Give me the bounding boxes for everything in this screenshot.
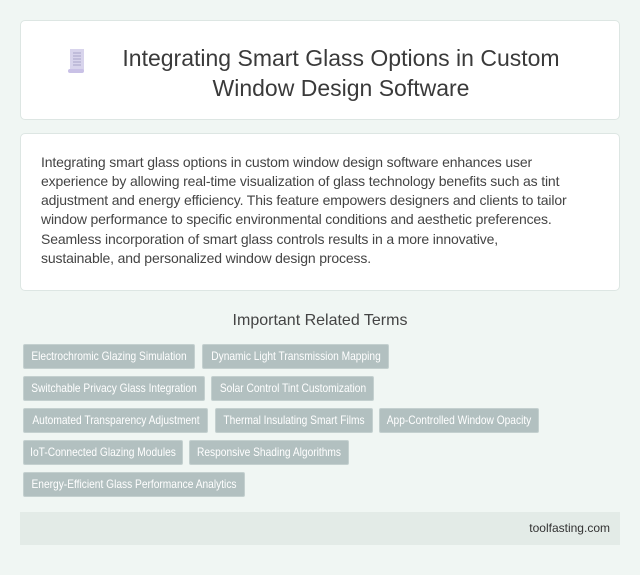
tags: Electrochromic Glazing Simulation <box>31 349 187 363</box>
description panel: sustainable, and personalized window design process. <box>41 250 371 266</box>
icon: document <box>68 49 84 73</box>
header panel <box>20 20 620 120</box>
tags: Dynamic Light Transmission Mapping <box>211 349 380 363</box>
tags: Energy-Efficient Glass Performance Analytics <box>31 477 237 491</box>
tags: Switchable Privacy Glass Integration <box>31 381 197 395</box>
description panel: experience by allowing real-time visualization of glass technology benefits such as tint <box>41 173 559 189</box>
tags: Responsive Shading Algorithms <box>197 445 341 459</box>
heading: related terms: Important Related Terms <box>233 312 407 329</box>
tags: IoT-Connected Glazing Modules <box>30 445 176 459</box>
description panel: adjustment and energy efficiency. This feature empowers designers and clients to tailor <box>41 192 566 208</box>
tags: Automated Transparency Adjustment <box>32 413 199 427</box>
description panel <box>20 133 620 291</box>
tags: Solar Control Tint Customization <box>219 381 366 395</box>
title: Integrating Smart Glass Options in Custom Window Design Software <box>122 45 560 101</box>
tags: App-Controlled Window Opacity <box>387 413 531 427</box>
footer <box>20 512 620 545</box>
tags: Thermal Insulating Smart Films <box>223 413 365 427</box>
description panel: window performance to specific environmental conditions and aesthetic preferences. <box>41 211 552 227</box>
footer: toolfasting.com <box>529 521 610 535</box>
description panel: Seamless incorporation of smart glass controls results in a more innovative, <box>41 231 498 247</box>
description panel: Integrating smart glass options in custom window design software enhances user <box>41 154 532 170</box>
